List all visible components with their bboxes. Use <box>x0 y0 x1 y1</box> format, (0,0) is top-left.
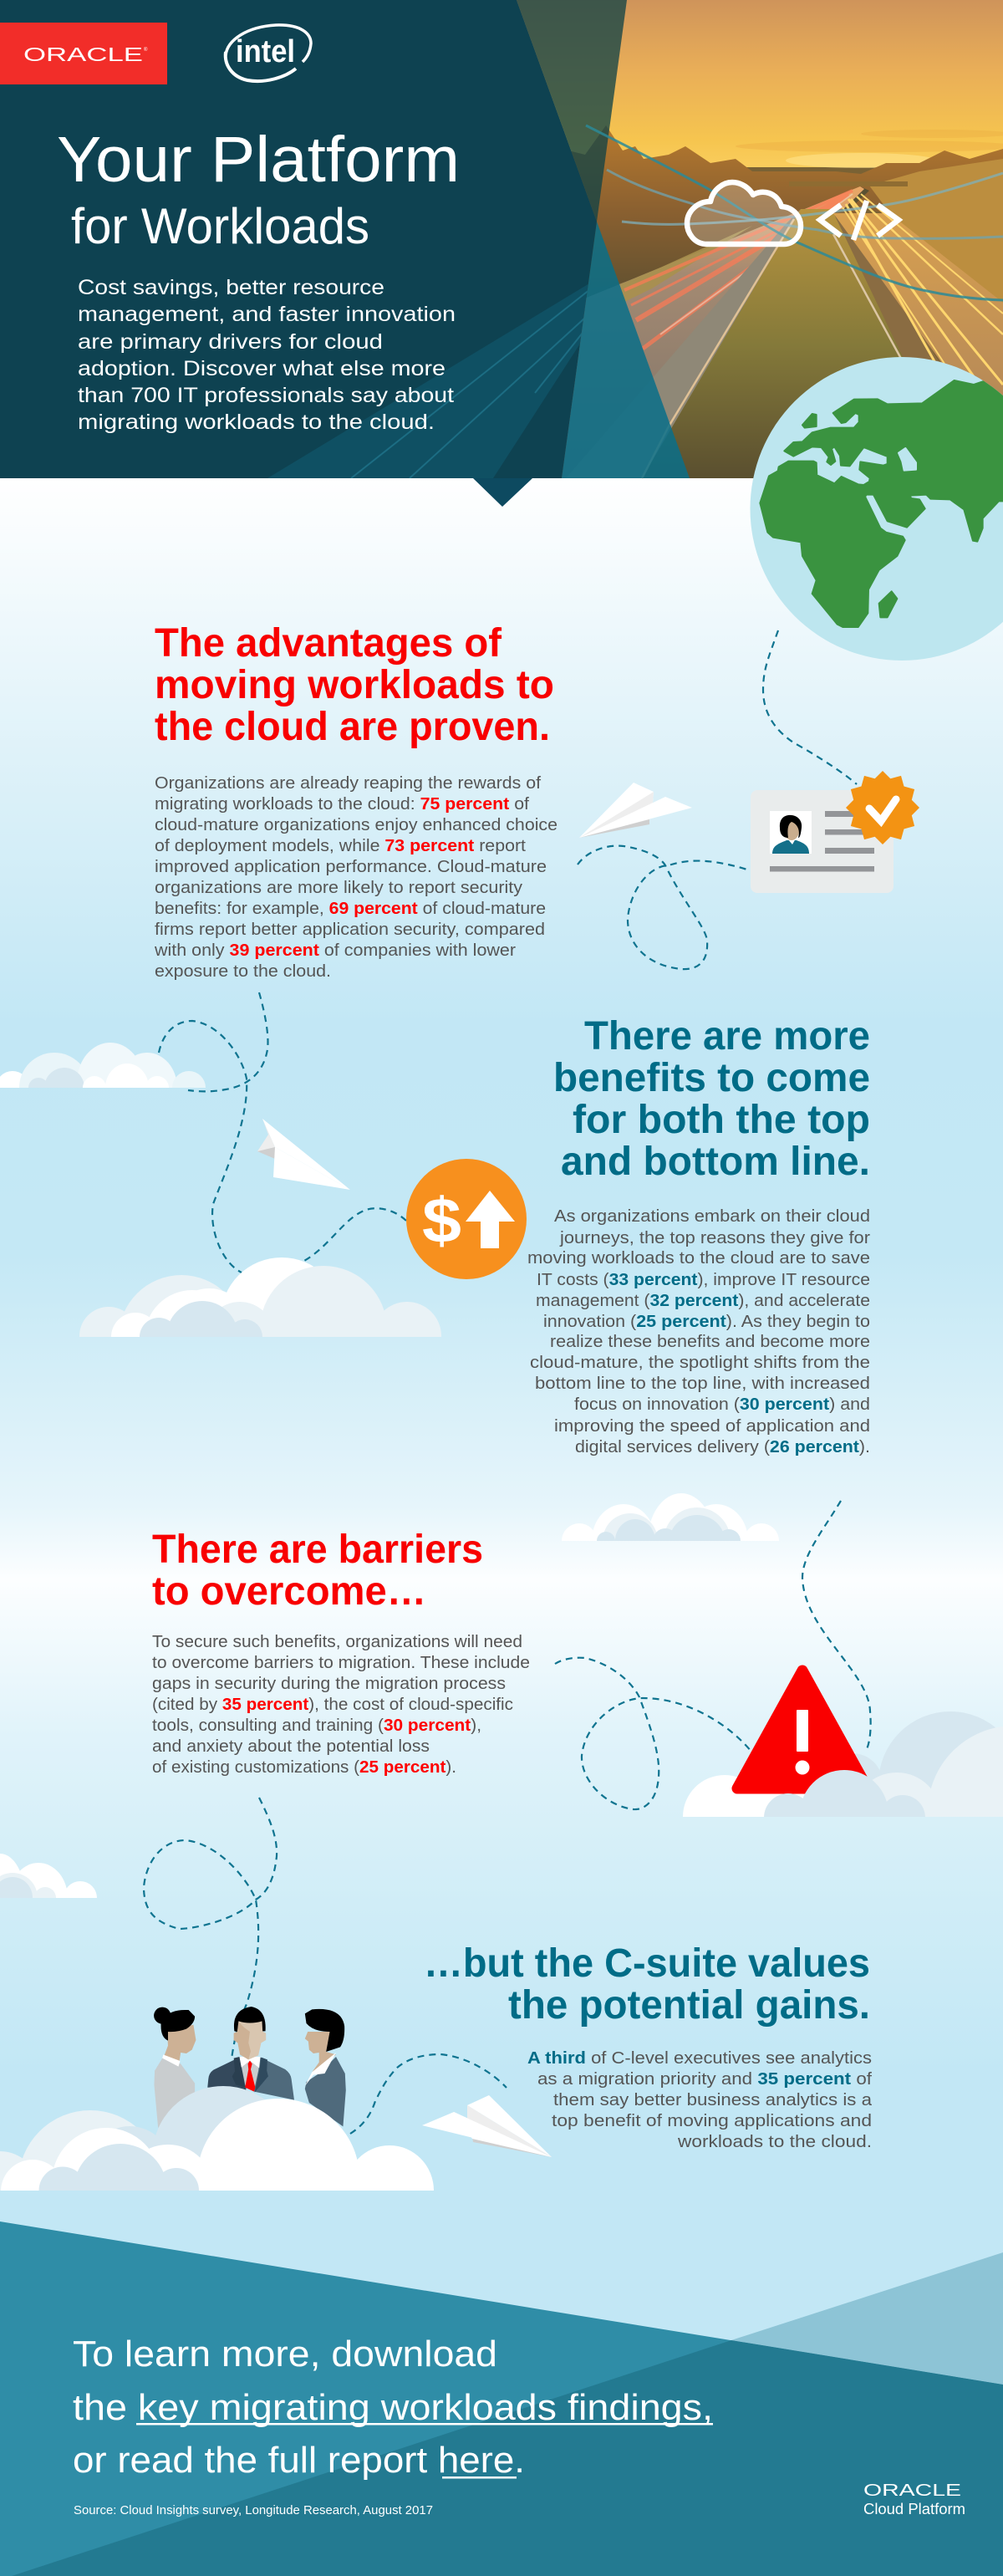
heading: the potential gains. <box>508 1983 870 2028</box>
heading: for both the top <box>573 1098 870 1142</box>
icon: dollar and up arrow <box>406 1159 527 1279</box>
faint highway in dark panel <box>267 284 588 478</box>
icon: dollar and up arrow: $ <box>422 1186 461 1257</box>
Oracle logo: ORACLE <box>23 43 143 65</box>
warning triangle <box>737 1671 868 1788</box>
paper plane <box>257 1119 350 1190</box>
heading: to overcome… <box>152 1569 426 1614</box>
hero intro text: than 700 IT professionals say about <box>78 384 454 407</box>
dashed path from globe to badge <box>763 630 857 784</box>
translucent olive facet <box>517 0 627 222</box>
paper plane <box>579 783 692 838</box>
body text: As organizations embark on their cloud <box>554 1207 870 1226</box>
heading <box>553 1014 870 1184</box>
section 3: barriers <box>152 1493 1003 1817</box>
heading: and bottom line. <box>561 1140 870 1184</box>
body text: A third of C-level executives see analytics <box>527 2049 872 2068</box>
footer <box>0 2221 1003 2576</box>
body text: them say better business analytics is a <box>553 2091 873 2109</box>
heading <box>424 1941 870 2028</box>
body text: benefits: for example, 69 percent of cloud-mature <box>155 900 546 918</box>
heading: The advantages of <box>155 621 502 666</box>
body text: management ( 32 percent ), and accelerate <box>536 1292 870 1310</box>
certified badge <box>846 771 919 844</box>
heading: There are more <box>584 1014 870 1058</box>
body text <box>527 1207 870 1456</box>
hero banner <box>0 0 1003 507</box>
hero intro text: management, and faster innovation <box>78 303 456 326</box>
Oracle Cloud Platform logo: ORACLE <box>863 2482 961 2500</box>
cloud: upper right <box>562 1493 779 1541</box>
heading: …but the C-suite values <box>424 1941 870 1986</box>
body text <box>527 2049 873 2151</box>
heading: moving workloads to <box>155 663 554 707</box>
hero intro text: adoption. Discover what else more <box>78 357 445 380</box>
body text <box>154 774 558 981</box>
hero intro text: are primary drivers for cloud <box>78 330 383 354</box>
executives illustration <box>154 2007 346 2128</box>
body text: bottom line to the top line, with increased <box>535 1375 870 1393</box>
dashed path through cloud <box>188 992 268 1091</box>
woman left <box>154 2007 196 2128</box>
dark teal panel <box>0 0 597 478</box>
translucent teal facet <box>562 222 690 478</box>
body text: innovation ( 25 percent ). As they begin to <box>543 1313 870 1331</box>
body text: with only 39 percent of companies with lower <box>154 941 516 960</box>
source note: Source: Cloud Insights survey, Longitude Research, August 2017 <box>74 2503 433 2517</box>
Oracle Cloud Platform logo <box>863 2482 965 2517</box>
cloud: small left <box>0 1854 97 1898</box>
heading <box>152 1528 483 1614</box>
Oracle logo <box>0 23 167 84</box>
body text: firms report better application security, compared <box>155 921 545 939</box>
body text: moving workloads to the cloud are to save <box>527 1249 870 1268</box>
warning icon on clouds <box>683 1665 1003 1817</box>
section 2: benefits <box>0 992 870 1456</box>
dashed loop to warning <box>555 1658 751 1809</box>
body text: as a migration priority and 35 percent of <box>537 2070 872 2089</box>
woman right <box>305 2009 346 2126</box>
body text: cloud-mature, the spotlight shifts from the <box>530 1354 870 1372</box>
body text: realize these benefits and become more <box>550 1333 870 1351</box>
hero bottom notch <box>473 478 532 507</box>
body text: to overcome barriers to migration. These include <box>152 1654 530 1672</box>
body text: migrating workloads to the cloud: 75 percent of <box>155 795 529 814</box>
call to action: or read the full report here. <box>73 2440 525 2481</box>
body text: gaps in security during the migration process <box>152 1675 506 1693</box>
heading <box>155 621 554 749</box>
profile photo <box>772 815 809 854</box>
body text <box>152 1633 530 1777</box>
body text: tools, consulting and training ( 30 percent), <box>152 1716 481 1735</box>
cloud: upper left <box>0 1043 206 1088</box>
body text: improving the speed of application and <box>554 1417 870 1436</box>
body text: digital services delivery ( 26 percent ). <box>575 1438 870 1456</box>
title <box>57 124 460 254</box>
heading: There are barriers <box>152 1528 483 1572</box>
heading: benefits to come <box>553 1056 870 1100</box>
call to action: the key migrating workloads findings, <box>73 2387 713 2428</box>
man center <box>207 2007 294 2100</box>
dashed loop to card <box>578 846 747 969</box>
paper plane <box>422 2095 552 2157</box>
Intel logo <box>226 25 311 81</box>
body text: of deployment models, while 73 percent report <box>155 837 526 855</box>
body text: focus on innovation ( 30 percent ) and <box>574 1395 870 1414</box>
hero intro text: migrating workloads to the cloud. <box>78 411 435 434</box>
dashed path downward <box>159 1021 247 1273</box>
body text: cloud-mature organizations enjoy enhanced choice <box>155 816 558 834</box>
icon: cloud <box>687 182 801 244</box>
body text: exposure to the cloud. <box>155 962 331 981</box>
footer background facets <box>0 2221 1003 2576</box>
body text: To secure such benefits, organizations will need <box>152 1633 522 1651</box>
Oracle Cloud Platform logo: Cloud Platform <box>863 2501 965 2517</box>
hero intro text <box>78 276 456 434</box>
globe <box>751 357 1003 661</box>
body text: journeys, the top reasons they give for <box>559 1229 870 1247</box>
section 1: advantages <box>154 621 919 981</box>
body text: workloads to the cloud. <box>677 2133 872 2151</box>
dashed path to warning <box>802 1501 871 1749</box>
hero photo: highway at sunset <box>0 0 1003 478</box>
body text: (cited by 35 percent), the cost of cloud-specific <box>152 1696 513 1714</box>
icon: code brackets <box>820 201 899 240</box>
body text: top benefit of moving applications and <box>552 2112 872 2130</box>
call to action: To learn more, download <box>73 2334 497 2375</box>
section 4: C-suite <box>0 1798 872 2191</box>
heading: the cloud are proven. <box>155 705 550 749</box>
dashed path to dollar icon <box>304 1208 406 1261</box>
dashed loop to executives <box>144 1798 277 2059</box>
body text: IT costs (33 percent ), improve IT resource <box>537 1271 870 1289</box>
body text: organizations are more likely to report security <box>155 879 522 897</box>
cloud: lower left <box>79 1257 441 1337</box>
Intel logo: intel <box>236 34 295 69</box>
Oracle logo: ® <box>144 47 148 53</box>
clouds under executives <box>0 2086 434 2191</box>
profile card icon <box>751 790 894 893</box>
body text: improved application performance. Cloud-mature <box>155 858 547 876</box>
title: Your Platform <box>57 124 460 196</box>
dashed path to plane <box>350 2054 507 2134</box>
call to action <box>73 2334 713 2481</box>
body text: of existing customizations ( 25 percent). <box>152 1758 456 1777</box>
title: for Workloads <box>71 198 369 254</box>
body text: and anxiety about the potential loss <box>152 1737 430 1756</box>
hero intro text: Cost savings, better resource <box>78 276 384 299</box>
flow curves <box>586 125 1003 300</box>
body text: Organizations are already reaping the rewards of <box>155 774 541 793</box>
